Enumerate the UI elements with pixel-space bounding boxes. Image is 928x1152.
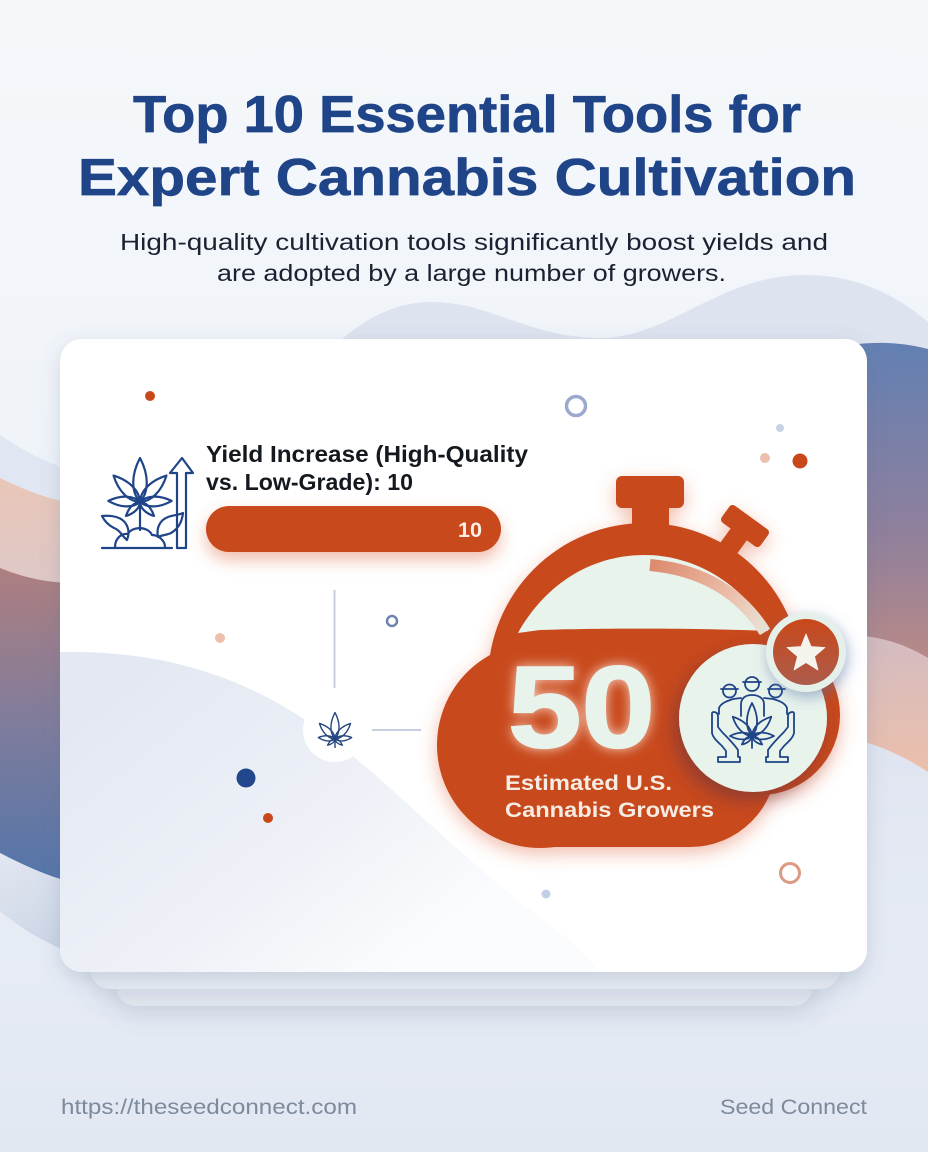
stopwatch stat panel (437, 476, 846, 848)
subtitle: are adopted by a large number of growers. (217, 260, 726, 286)
title: Top 10 Essential Tools for (133, 86, 801, 144)
stat label: Estimated U.S. (505, 772, 672, 795)
background waves: right side (850, 343, 928, 1040)
title: Expert Cannabis Cultivation (78, 149, 856, 207)
yield heading: Yield Increase (High-Quality (206, 441, 528, 467)
icon: growers and cupped hands (712, 677, 794, 762)
footer url: https://theseedconnect.com (61, 1096, 357, 1119)
growers icon circle (679, 644, 827, 792)
stat label: Cannabis Growers (505, 799, 714, 822)
stat label (505, 772, 714, 822)
yield heading (206, 441, 528, 495)
card lower-left wave (60, 652, 600, 972)
footer brand: Seed Connect (720, 1096, 867, 1119)
yield heading: vs. Low-Grade): 10 (206, 469, 413, 495)
title (78, 86, 856, 207)
stopwatch body (437, 476, 840, 848)
background waves: left side (0, 435, 70, 952)
star badge (766, 612, 846, 692)
big number: 50 (508, 642, 655, 772)
subtitle (120, 229, 828, 286)
stacked card layers (90, 900, 840, 1006)
yield bar (206, 506, 501, 552)
main card (60, 339, 867, 972)
subtitle: High-quality cultivation tools significantly boost yields and (120, 229, 828, 255)
decorative dots and rings (145, 391, 808, 898)
background waves: top hump (335, 275, 928, 420)
icon: plant with growth arrow (102, 458, 193, 548)
connector lines (334, 590, 421, 730)
dial progress arc (650, 565, 765, 632)
yield bar: 10 (458, 519, 482, 542)
dial window (518, 555, 768, 633)
connector leaf node (303, 698, 367, 762)
